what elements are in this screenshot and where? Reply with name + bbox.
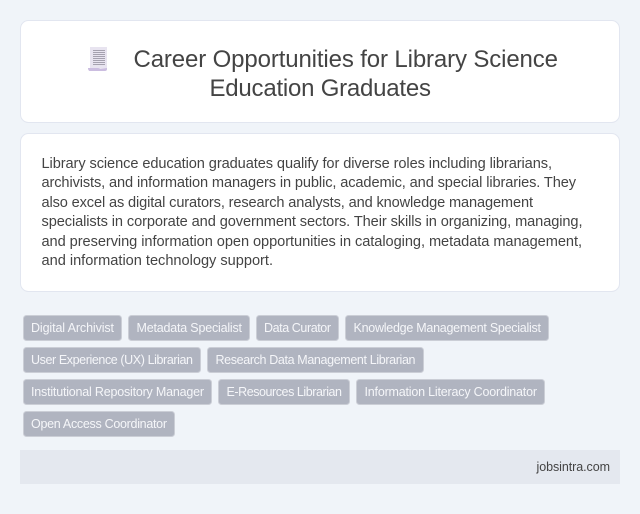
- tag: Institutional Repository Manager: [24, 380, 212, 404]
- text block: description: archivists, and information managers in public, academic, and special libraries. They: [42, 175, 577, 191]
- panel: header: [20, 20, 620, 122]
- tag: Digital Archivist: Digital Archivist: [31, 321, 115, 335]
- tag: Information Literacy Coordinator: [356, 380, 544, 404]
- text block: description: also excel as digital curators, research analysts, and knowledge management: [42, 195, 533, 211]
- tag: Data Curator: [256, 316, 338, 340]
- tag: Open Access Coordinator: Open Access Coordinator: [31, 417, 167, 431]
- tag: Data Curator: Data Curator: [264, 321, 331, 335]
- text block: description: and preserving information open opportunities in cataloging, metadata management,: [42, 234, 582, 250]
- tag: User Experience (UX) Librarian: [24, 348, 200, 372]
- tag: Open Access Coordinator: [24, 412, 174, 436]
- tag: Knowledge Management Specialist: Knowledge Management Specialist: [354, 321, 542, 335]
- icon: document scroll: [88, 47, 107, 71]
- text block: description: [42, 156, 582, 269]
- title: Education Graduates: [210, 75, 431, 102]
- panel: description: [20, 134, 620, 292]
- tag: E-Resources Librarian: [218, 380, 350, 404]
- tag: User Experience (UX) Librarian: User Experience (UX) Librarian: [31, 353, 193, 367]
- text block: description: Library science education graduates qualify for diverse roles including librarians,: [42, 156, 552, 172]
- tag: Research Data Management Librarian: [208, 348, 424, 372]
- text block: description: and information technology support.: [42, 253, 273, 269]
- tag: E-Resources Librarian: E-Resources Librarian: [226, 385, 342, 399]
- panel: career tags: [24, 316, 548, 436]
- tag: Digital Archivist: [24, 316, 122, 340]
- title: [134, 46, 558, 102]
- tag: Knowledge Management Specialist: [346, 316, 548, 340]
- tag: Metadata Specialist: Metadata Specialist: [136, 321, 243, 335]
- tag: Metadata Specialist: [128, 316, 250, 340]
- footer: jobsintra.com: [536, 460, 610, 474]
- footer: [20, 450, 620, 484]
- title: Career Opportunities for Library Science: [134, 46, 558, 73]
- tag: Information Literacy Coordinator: Information Literacy Coordinator: [364, 385, 537, 399]
- tag: Institutional Repository Manager: Institutional Repository Manager: [31, 385, 204, 399]
- text block: description: specialists in corporate and government sectors. Their skills in organizing, managing,: [42, 214, 582, 230]
- tag: Research Data Management Librarian: Research Data Management Librarian: [216, 353, 416, 367]
